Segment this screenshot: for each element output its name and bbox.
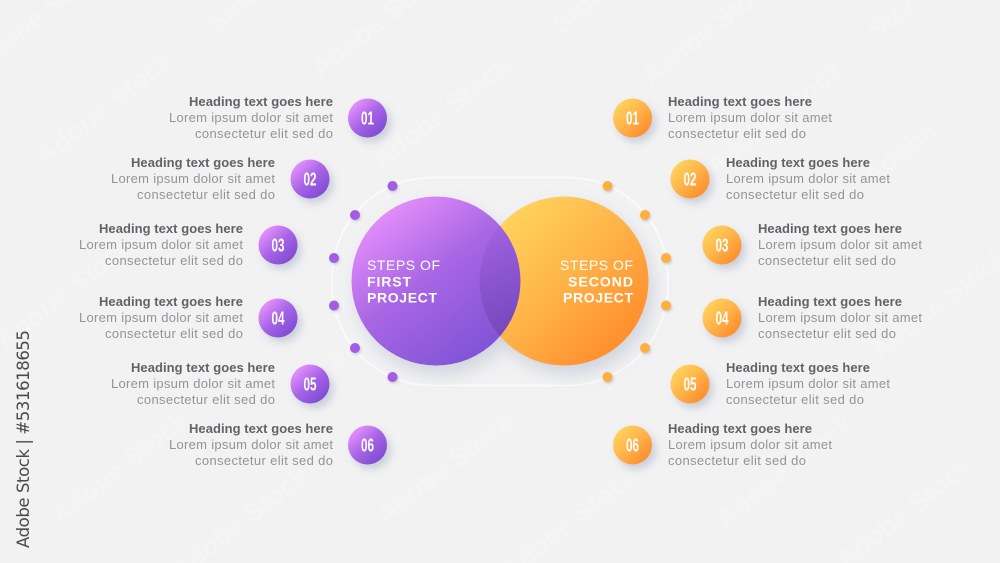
right step 02	[670, 155, 890, 202]
overlap of the two circles	[480, 238, 520, 336]
watermark: Adobe Stock pattern: Adobe Stock	[530, 240, 679, 366]
right step 01: consectetur elit sed do	[668, 126, 806, 141]
left step 01: consectetur elit sed do	[195, 126, 333, 141]
text: steps of first project	[367, 257, 440, 306]
right step 04: Lorem ipsum dolor sit amet	[758, 310, 922, 325]
left step 05: consectetur elit sed do	[137, 392, 275, 407]
left step 02: Heading text goes here	[131, 155, 275, 170]
left step 02: 02	[304, 170, 316, 190]
right step 06	[613, 421, 832, 468]
right step 05: consectetur elit sed do	[726, 392, 864, 407]
right step 06: Heading text goes here	[668, 421, 812, 436]
right step 03: 03	[716, 236, 728, 256]
connector dots: second project	[602, 181, 671, 382]
text: steps of second project: STEPS OF	[560, 257, 633, 273]
right step 05: 05	[684, 374, 696, 394]
left step 04	[79, 294, 298, 341]
left step 03: Lorem ipsum dolor sit amet	[79, 237, 243, 252]
right step 06: consectetur elit sed do	[668, 453, 806, 468]
right step 03: Lorem ipsum dolor sit amet	[758, 237, 922, 252]
right step 02: consectetur elit sed do	[726, 187, 864, 202]
left step 02	[111, 155, 330, 202]
text: steps of second project	[560, 257, 633, 306]
connector dots: first project	[329, 181, 398, 382]
watermark: Adobe Stock pattern: Adobe Stock	[45, 405, 194, 531]
right step 01: 01	[626, 108, 639, 128]
left step 05	[111, 360, 330, 407]
watermark: Adobe Stock pattern: Adobe Stock	[320, 252, 469, 378]
left step 04: 04	[272, 308, 284, 328]
right step 05	[670, 360, 890, 407]
left step 05: Lorem ipsum dolor sit amet	[111, 376, 275, 391]
left step 04: Heading text goes here	[99, 294, 243, 309]
right step 01: Lorem ipsum dolor sit amet	[668, 110, 832, 125]
right step 02: 02	[684, 170, 696, 190]
left step 01	[169, 94, 387, 141]
left step 01: 01	[361, 108, 374, 128]
watermark: Adobe Stock pattern: Adobe Stock	[710, 408, 859, 534]
right step 01: Heading text goes here	[668, 94, 812, 109]
right step 04: 04	[716, 308, 728, 328]
text: steps of first project: STEPS OF	[367, 257, 440, 273]
circle: second project	[480, 196, 648, 366]
text: steps of first project: PROJECT	[367, 290, 437, 306]
left step 06: consectetur elit sed do	[195, 453, 333, 468]
left step 05: 05	[304, 374, 316, 394]
stock id caption: Adobe Stock | #531618655	[14, 330, 33, 548]
right step 01	[613, 94, 832, 141]
left step 04: Lorem ipsum dolor sit amet	[79, 310, 243, 325]
right step 03: Heading text goes here	[758, 221, 902, 236]
watermark: Adobe Stock pattern: Adobe	[857, 115, 942, 191]
right step 06: Lorem ipsum dolor sit amet	[668, 437, 832, 452]
circle shadows	[352, 197, 648, 365]
right step 03	[702, 221, 922, 268]
venn diagram	[352, 196, 648, 366]
left step 04: consectetur elit sed do	[105, 326, 243, 341]
left step 03: 03	[272, 236, 284, 256]
right step 04	[702, 294, 922, 341]
right step 05: Lorem ipsum dolor sit amet	[726, 376, 890, 391]
left step 01: Lorem ipsum dolor sit amet	[169, 110, 333, 125]
left step 06: Lorem ipsum dolor sit amet	[169, 437, 333, 452]
right step 06: 06	[626, 436, 639, 456]
watermark: Adobe Stock pattern: Adobe Stock	[370, 405, 519, 531]
left step 05: Heading text goes here	[131, 360, 275, 375]
right step 04: consectetur elit sed do	[758, 326, 896, 341]
watermark: Adobe Stock pattern: Adobe Stock	[700, 55, 849, 181]
left step 03: Heading text goes here	[99, 221, 243, 236]
left step 02: consectetur elit sed do	[137, 187, 275, 202]
left step 02: Lorem ipsum dolor sit amet	[111, 171, 275, 186]
right step 05: Heading text goes here	[726, 360, 870, 375]
text: steps of second project: PROJECT	[563, 290, 633, 306]
right step 02: Lorem ipsum dolor sit amet	[726, 171, 890, 186]
outline ring around the diagram	[332, 178, 668, 386]
right step 02: Heading text goes here	[726, 155, 870, 170]
watermark: Adobe Stock pattern: Adobe Stock	[367, 50, 516, 176]
left step 06: 06	[361, 436, 374, 456]
left step 03	[79, 221, 298, 268]
circle: first project	[352, 196, 520, 366]
text: steps of second project: SECOND	[568, 274, 633, 290]
watermark: Adobe Stock pattern: Adobe Stock	[30, 45, 179, 171]
right step 04: Heading text goes here	[758, 294, 902, 309]
left step 03: consectetur elit sed do	[105, 253, 243, 268]
left step 01: Heading text goes here	[189, 94, 333, 109]
text: steps of first project: FIRST	[367, 274, 411, 290]
left step 06: Heading text goes here	[189, 421, 333, 436]
right step 03: consectetur elit sed do	[758, 253, 896, 268]
left step 06	[169, 421, 387, 468]
